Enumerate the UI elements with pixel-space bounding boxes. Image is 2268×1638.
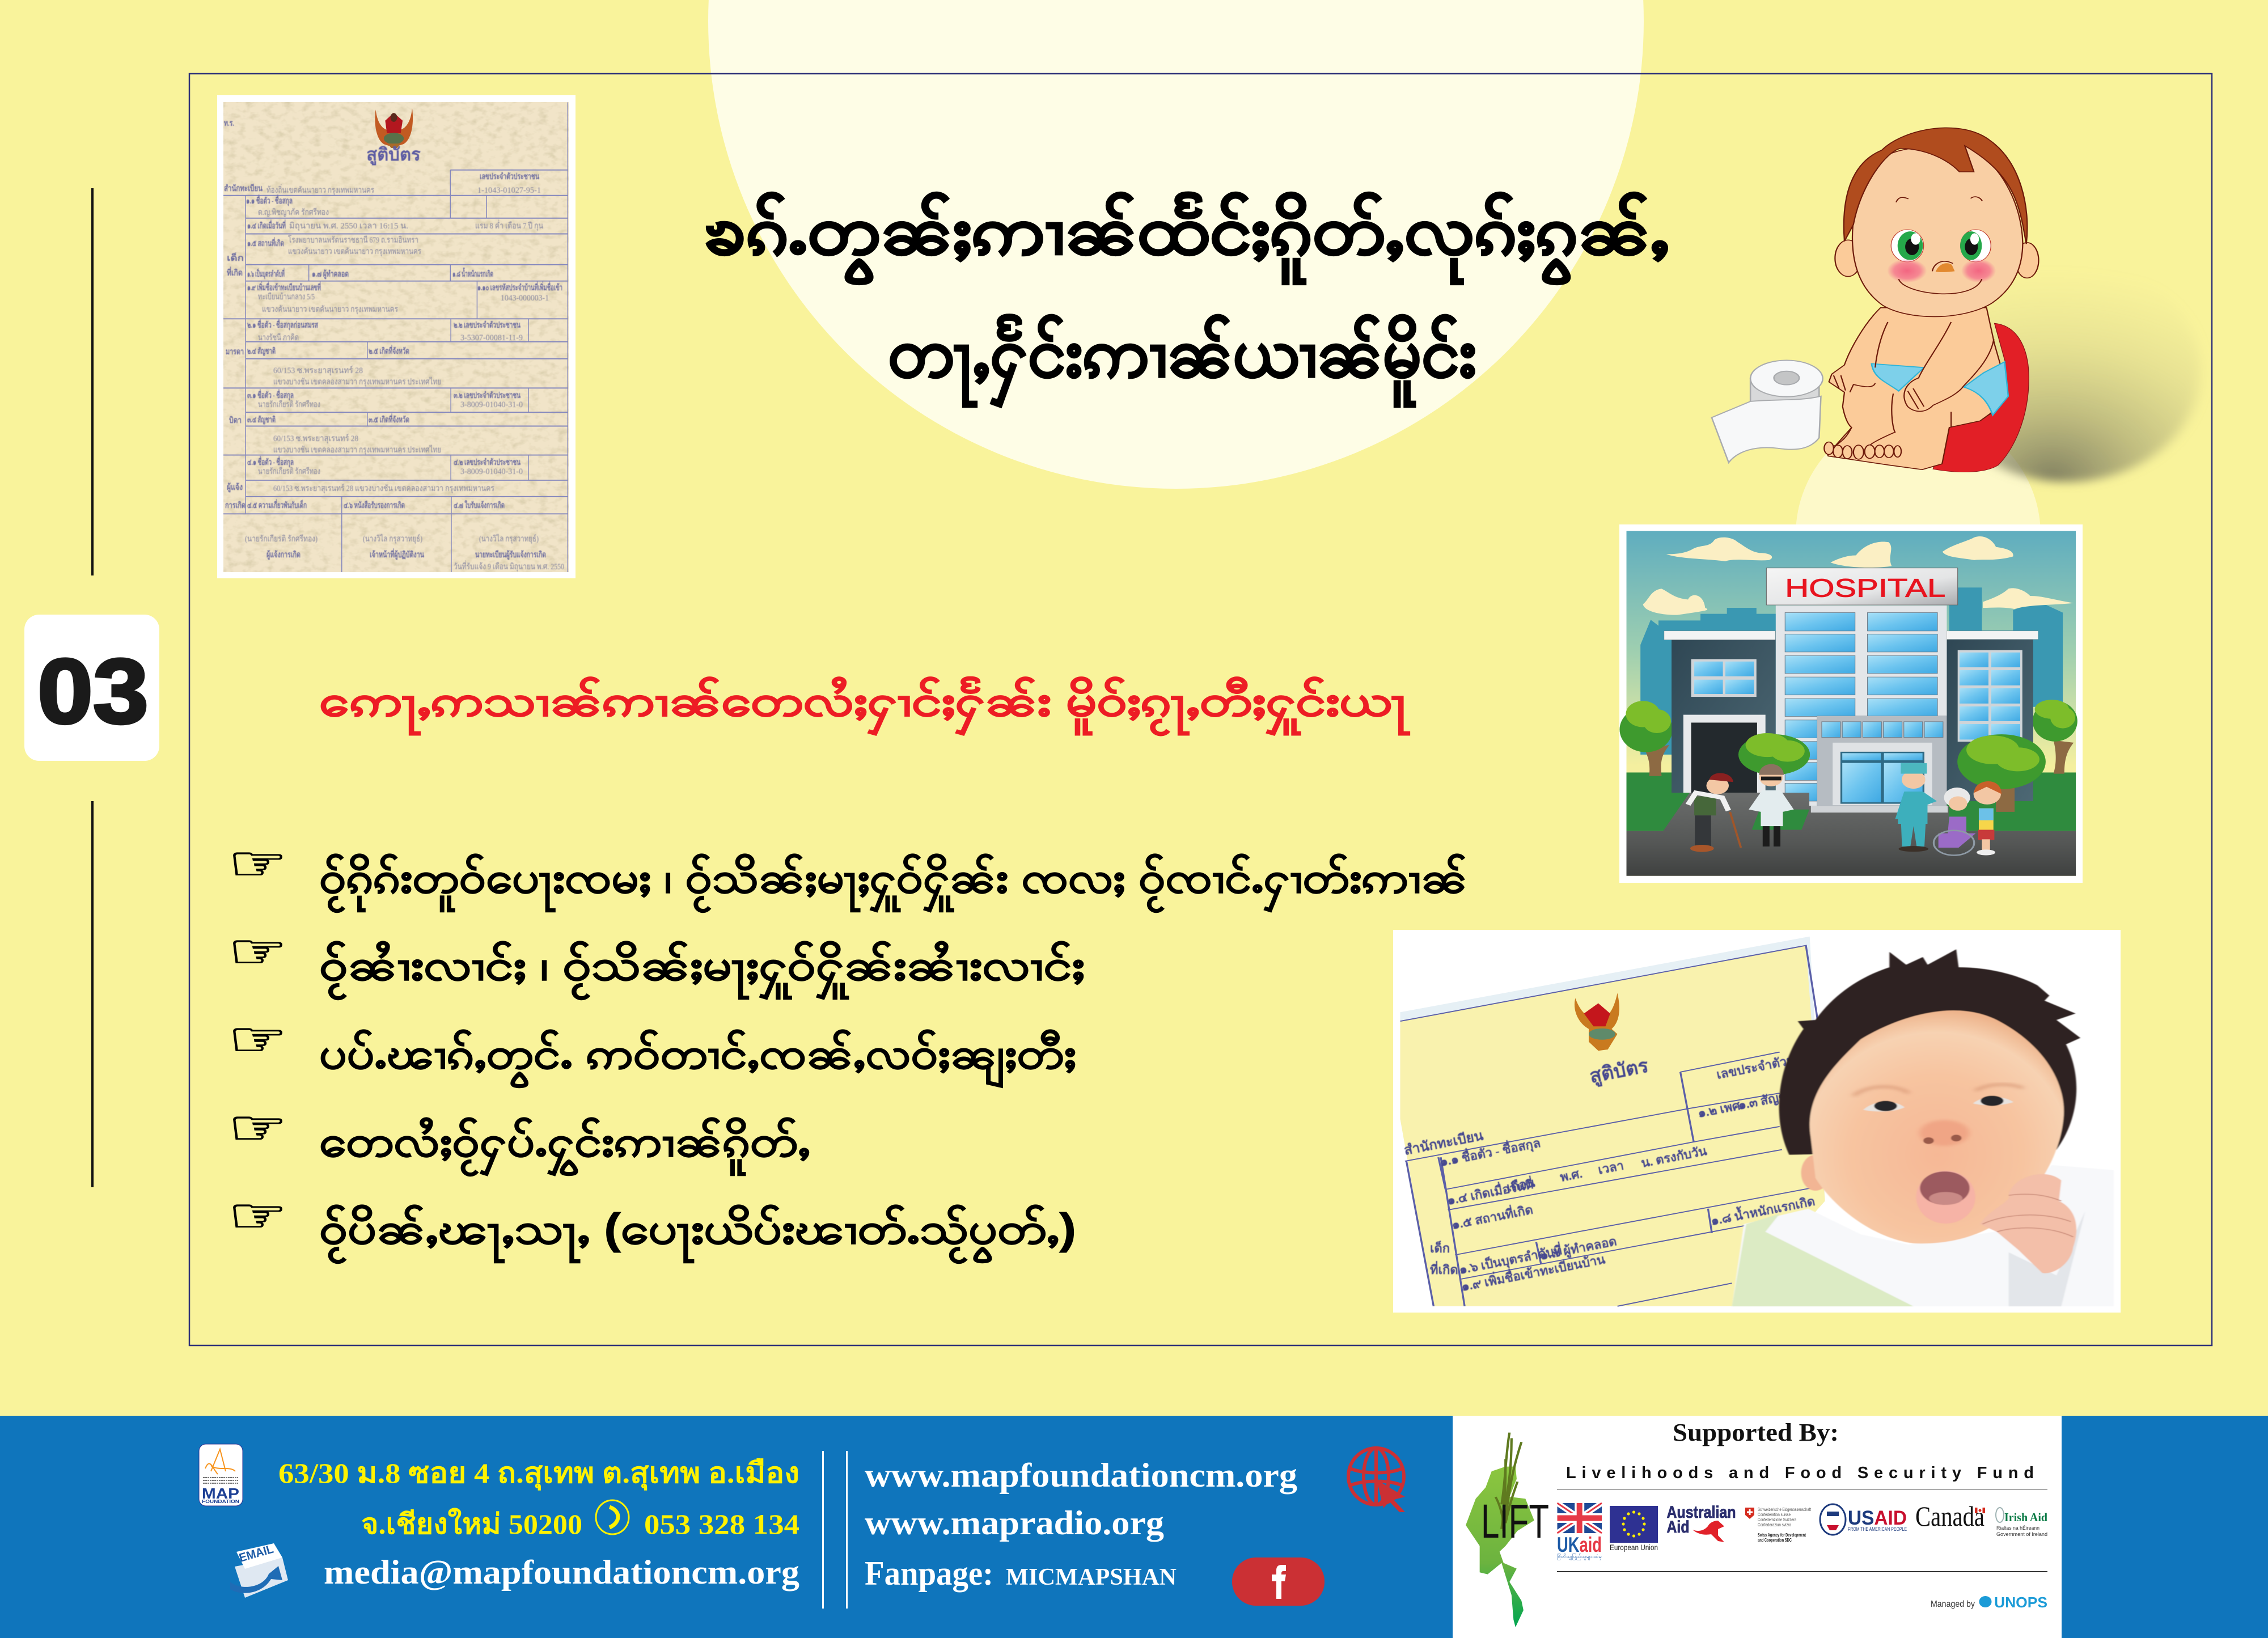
certificate text: นายทะเบียนผู้รับแจ้งการเกิด bbox=[475, 549, 546, 560]
certificate text: ท้องถิ่นเขตคันนายาว กรุงเทพมหานคร bbox=[266, 184, 374, 196]
decorative small cream circle behind baby bbox=[1796, 412, 2041, 657]
item 1: ☞ bbox=[228, 836, 287, 891]
certificate text: โรงพยาบาลนพรัตนราชธานี 679 ถ.รามอินทรา bbox=[288, 235, 418, 245]
hospital sign: HOSPITAL bbox=[1785, 574, 1945, 603]
certificate thai text: ๑.๓ สัญชาติ bbox=[1737, 1086, 1803, 1113]
certificate text: ๒.๔ สัญชาติ bbox=[247, 346, 276, 356]
baby ear bbox=[1801, 1155, 1830, 1191]
clouds bbox=[1643, 536, 2074, 615]
certificate text: ๑.๑ ชื่อตัว - ชื่อสกุล bbox=[246, 194, 293, 206]
item 3 bbox=[228, 1011, 1076, 1089]
front trees bbox=[1738, 733, 2046, 812]
item 4: ☞ bbox=[228, 1100, 287, 1156]
certificate text: ๔.๑ ชื่อตัว - ชื่อสกุล bbox=[247, 456, 294, 468]
certificate text: (นายรักเกียรติ รักศรีทอง) bbox=[245, 534, 318, 544]
logo: UK aid: ဗြိတိသျှပြည်သူများထံမှ bbox=[1557, 1553, 1602, 1560]
certificate text: มิถุนายน พ.ศ. 2550 เวลา 16:15 น. bbox=[289, 221, 408, 231]
title bbox=[704, 192, 1669, 408]
skyline bbox=[1640, 587, 2063, 755]
item 3: ☞ bbox=[228, 1011, 287, 1067]
footer websites: Fanpage: bbox=[865, 1555, 993, 1592]
certificate text: ๑.๕ สถานที่เกิด bbox=[247, 237, 284, 248]
certificate text: 60/153 ซ.พระยาสุเรนทร์ 28 bbox=[273, 366, 363, 376]
logo: Irish Aid: Rialtas na hÉireann bbox=[1996, 1525, 2039, 1531]
certificate text: แขวงคันนายาว เขตคันนายาว กรุงเทพมหานคร bbox=[288, 247, 421, 257]
old man bbox=[1706, 777, 1729, 794]
logo: Canada: Canada bbox=[1915, 1500, 1984, 1532]
item 5: ဝႂ်ပိၼ်ႇၽႃႇသႃႇ (ပေႃးယိပ်းၽၢတ်ႉသႂ်ပွတ်ႇ) bbox=[319, 1204, 1076, 1264]
managed by UNOPS: UNOPS bbox=[1994, 1594, 2047, 1611]
item 4: တေလႆႈဝႂ်ႁပ်ႉႁွင်းဢၢၼ်ၵိူတ်ႇ bbox=[319, 1117, 810, 1177]
certificate text: แขวงบางชัน เขตคลองสามวา กรุงเทพมหานคร ประเทศไทย bbox=[273, 376, 441, 387]
logo: Swiss agency bbox=[1745, 1507, 1812, 1543]
item 5 bbox=[228, 1188, 1076, 1264]
certificate text: ๔.๕ ความเกี่ยวพันกับเด็ก bbox=[247, 499, 307, 510]
pavement bbox=[1627, 793, 2076, 876]
certificate text bbox=[224, 119, 564, 572]
certificate text: แรม 8 ค่ำ เดือน 7 ปี กุน bbox=[475, 219, 543, 231]
logo: Australian Aid: Aid bbox=[1667, 1518, 1690, 1537]
photo: newborn baby with birth certificate bbox=[1393, 930, 2121, 1313]
certificate text: การเกิด bbox=[225, 500, 246, 510]
red potty bbox=[1933, 323, 2029, 472]
wings bbox=[1672, 640, 1776, 793]
fund name: Livelihoods and Food Security Fund bbox=[1566, 1464, 2034, 1482]
decorative large cream circle behind title bbox=[708, 0, 1644, 489]
certificate text: ๒.๑ ชื่อตัว - ชื่อสกุลก่อนสมรส bbox=[247, 319, 319, 331]
icon: email envelope: EMAIL bbox=[238, 1543, 275, 1565]
certificate text: ผู้แจ้งการเกิด bbox=[266, 549, 301, 560]
certificate text: ๒.๕ เกิดที่จังหวัด bbox=[369, 345, 409, 356]
toes bbox=[1824, 442, 1901, 459]
certificate thai text: ๑.๑ ชื่อตัว - ชื่อสกุล bbox=[1438, 1133, 1542, 1170]
ears bbox=[1835, 240, 1861, 277]
central tower bbox=[1776, 606, 1947, 806]
logo: Swiss agency: Confederaziun svizra bbox=[1758, 1522, 1791, 1527]
certificate text: ๓.๒ เลขประจำตัวประชาชน bbox=[454, 391, 521, 400]
managed by UNOPS: Managed by bbox=[1931, 1599, 1975, 1609]
cheeks bbox=[1887, 259, 1927, 283]
potty shadow bbox=[1933, 258, 2201, 482]
certificate thai text: เดือน bbox=[1505, 1175, 1536, 1195]
certificate text: ๓.๔ สัญชาติ bbox=[247, 414, 276, 425]
logo: European Union bbox=[1610, 1506, 1658, 1552]
certificate text: 60/153 ซ.พระยาสุเรนทร์ 28 แขวงบางชัน เขตคลองสามวา กรุงเทพมหานคร bbox=[273, 484, 494, 494]
certificate text: วันที่รับแจ้ง 9 เดือน มิถุนายน พ.ศ. 2550 bbox=[454, 560, 564, 572]
smile and brows bbox=[1896, 197, 1982, 294]
logo: Australian Aid: Australian bbox=[1667, 1503, 1736, 1522]
certificate text: ท.ร. bbox=[224, 119, 234, 128]
entrance block bbox=[1817, 716, 1947, 806]
certificate text: นางรัชนี ภาคิด bbox=[258, 333, 299, 342]
certificate text: 3-8009-01040-31-0 bbox=[460, 467, 523, 476]
footer email: media@mapfoundationcm.org bbox=[324, 1554, 799, 1591]
hospital illustration bbox=[1619, 524, 2083, 883]
logo: USAID bbox=[1820, 1504, 1907, 1535]
certificate text: 1-1043-01027-95-1 bbox=[477, 186, 541, 195]
item 2 bbox=[228, 924, 1085, 1001]
illustration: baby sitting on potty with toilet roll bbox=[1712, 128, 2201, 482]
left door bbox=[1683, 715, 1766, 793]
certificate text: เด็ก bbox=[227, 252, 244, 263]
baby nose bbox=[1919, 1120, 1969, 1146]
garuda emblem bbox=[375, 108, 413, 148]
certificate text: ๑.๗ ผู้ทำคลอด bbox=[312, 269, 349, 280]
tower windows bbox=[1785, 612, 1937, 801]
nose bbox=[1936, 263, 1954, 272]
logo: Irish Aid: Government of Ireland bbox=[1996, 1531, 2047, 1537]
people bbox=[1688, 763, 2002, 856]
certificate thai text: ๑.๗ ผู้ทำคลอด bbox=[1539, 1234, 1618, 1264]
supported by heading: Supported By: bbox=[1673, 1419, 1839, 1446]
footer websites bbox=[865, 1457, 1297, 1592]
title: ၶၵ်ႉတွၼ်ႈဢၢၼ်ထႅင်ႈၵိူတ်ႇလုၵ်ႈၵွၼ်ႇ bbox=[704, 192, 1669, 285]
item 3: ပပ်ႉၽၢၵ်ႇတွင်ႉ ဢဝ်တၢင်ႇၸၼ်ႇလဝ်ႈၼျႈတီႈ bbox=[319, 1029, 1076, 1089]
icon: phone bbox=[596, 1500, 629, 1534]
baby brow shading bbox=[1854, 1085, 2023, 1096]
certificate text: (นางวิไล กรุสวาทยุธ์) bbox=[363, 534, 422, 544]
certificate thai text: น. ตรงกับวัน bbox=[1640, 1144, 1708, 1170]
certificate text: แขวงบางชัน เขตคลองสามวา กรุงเทพมหานคร ประเทศไทย bbox=[273, 445, 441, 455]
logo: European Union: European Union bbox=[1610, 1543, 1658, 1552]
certificate thai text: สูติบัตร bbox=[1588, 1055, 1651, 1089]
right window bbox=[1958, 650, 2022, 742]
logo: Swiss agency: Swiss Agency for Development bbox=[1758, 1533, 1806, 1538]
item 5: ☞ bbox=[228, 1188, 287, 1243]
ground bbox=[1627, 772, 2076, 831]
certificate text: นายรักเกียรติ รักศรีทอง bbox=[258, 400, 320, 409]
certificate thai text bbox=[1403, 1044, 1840, 1294]
certificate thai text: ที่เกิด bbox=[1430, 1260, 1458, 1277]
footer websites: www.mapradio.org bbox=[865, 1504, 1164, 1542]
hospital sign bbox=[1766, 568, 1958, 605]
certificate text: ๒.๒ เลขประจำตัวประชาชน bbox=[454, 320, 521, 330]
logo: USAID: USAID bbox=[1848, 1507, 1907, 1529]
certificate text: ผู้แจ้ง bbox=[227, 482, 243, 493]
left window bbox=[1691, 659, 1757, 697]
left vertical rule bottom bbox=[91, 801, 94, 1187]
certificate thai text: ๑.๖ เป็นบุตรลำดับที่ bbox=[1457, 1241, 1563, 1278]
baby hand bbox=[1980, 1174, 2076, 1273]
baby eyes bbox=[1863, 1096, 2013, 1111]
certificate thai text: ๑.๙ เพิ่มชื่อเข้าทะเบียนบ้าน bbox=[1459, 1250, 1606, 1294]
nurse bbox=[1902, 771, 1926, 789]
logo: UK aid bbox=[1557, 1503, 1602, 1560]
logo: Irish Aid: Irish Aid bbox=[2004, 1510, 2047, 1524]
trees behind bbox=[1619, 700, 2077, 776]
certificate text: สำนักทะเบียน bbox=[224, 184, 263, 193]
logo: UK aid: UKaid bbox=[1557, 1533, 1602, 1556]
doctor bbox=[1759, 768, 1783, 786]
certificate thai text: ๑.๒ เพศ bbox=[1696, 1098, 1742, 1120]
certificate text: ด.ญ.พิชญาภัค รักศรีทอง bbox=[258, 208, 329, 217]
certificate text: ที่เกิด bbox=[227, 266, 243, 278]
certificate text: 3-5307-00081-11-9 bbox=[460, 333, 523, 342]
certificate text: ๑.๑๐ เลขรหัสประจำบ้านที่เพิ่มชื่อเข้า bbox=[477, 281, 562, 293]
certificate text: ๔.๒ เลขประจำตัวประชาชน bbox=[454, 458, 521, 467]
LIFT map logo bbox=[1466, 1433, 1549, 1627]
certificate text: 60/153 ซ.พระยาสุเรนทร์ 28 bbox=[273, 434, 358, 444]
diaper bbox=[1872, 362, 2008, 415]
item 2: ☞ bbox=[228, 924, 287, 979]
icon: email envelope bbox=[230, 1543, 288, 1598]
footer websites: www.mapfoundationcm.org bbox=[865, 1457, 1297, 1494]
logo: USAID: FROM THE AMERICAN PEOPLE bbox=[1848, 1526, 1907, 1532]
certificate text: แขวงคันนายาว เขตคันนายาว กรุงเทพมหานคร bbox=[262, 305, 398, 315]
document checklist bbox=[228, 836, 1467, 1264]
content frame bbox=[189, 74, 2212, 1345]
baby body bbox=[1825, 308, 2007, 469]
logo: Irish Aid bbox=[1996, 1508, 2047, 1537]
logo: Swiss agency: Confédération suisse bbox=[1758, 1512, 1791, 1517]
eyes bbox=[1891, 230, 1991, 262]
certificate thai text: ๑.๕ สถานที่เกิด bbox=[1450, 1200, 1534, 1232]
certificate thai text: สำนักทะเบียน bbox=[1403, 1128, 1485, 1158]
footer logo: MAP Foundation bbox=[199, 1444, 243, 1506]
image: birth certificate document bbox=[217, 95, 576, 578]
certificate text: สูติบัตร bbox=[366, 145, 421, 166]
baby mouth bbox=[1916, 1171, 1975, 1224]
red subheading: ဢေႃႇဢသၢၼ်ဢၢၼ်တေလႆႈႁၢင်ႈႁႅၼ်း မိူဝ်ႈၵႂႃႇတီႈႁူင်းယႃ bbox=[319, 676, 1410, 737]
certificate text: บิดา bbox=[229, 415, 242, 425]
footer websites: MICMAPSHAN bbox=[1006, 1564, 1177, 1590]
section number badge bbox=[24, 615, 159, 761]
LIFT map logo: LIFT bbox=[1481, 1495, 1549, 1548]
footer address: 63/30 ม.8 ซอย 4 ถ.สุเทพ ต.สุเทพ อ.เมือง bbox=[278, 1457, 799, 1491]
footer logo: MAP Foundation: MAP bbox=[202, 1485, 239, 1502]
certificate text: 1043-000003-1 bbox=[501, 294, 549, 303]
certificate thai text: ๑.๔ เกิดเมื่อวันที่ bbox=[1445, 1175, 1534, 1208]
certificate text: นายรักเกียรติ รักศรีทอง bbox=[258, 467, 320, 476]
baby clothing bbox=[1732, 1165, 2114, 1306]
left vertical rule top bbox=[91, 188, 94, 575]
wheelchair lady bbox=[1944, 788, 1970, 807]
certificate text: ๓.๕ เกิดที่จังหวัด bbox=[369, 413, 409, 425]
item 1: ဝႂ်ၵိုၵ်းတူဝ်ပေႃးၸမႈ ၊ ဝႂ်သိၼ်ႈမႃႈႁူဝ်ႁိူၼ်း ၸလႈ ဝႂ်ၸၢင်ႉႁၢတ်းဢၢၼ် bbox=[319, 853, 1467, 913]
certificate text: ๑.๘ น้ำหนักแรกเกิด bbox=[452, 267, 493, 279]
sponsor panel bbox=[1453, 1416, 2062, 1638]
certificate text: ๓.๑ ชื่อตัว - ชื่อสกุล bbox=[247, 389, 294, 401]
certificate text: เลขประจำตัวประชาชน bbox=[480, 172, 540, 181]
certificate text: (นางวิไล กรุสวาทยุธ์) bbox=[479, 534, 539, 544]
boy bbox=[1974, 784, 2001, 805]
certificate text: 3-8009-01040-31-0 bbox=[460, 400, 523, 409]
garuda emblem bbox=[1575, 993, 1619, 1051]
item 1 bbox=[228, 836, 1467, 913]
certificate thai text: เด็ก bbox=[1430, 1240, 1450, 1255]
certificate text: มารดา bbox=[226, 348, 244, 357]
icon: red globe with cursor bbox=[1348, 1448, 1405, 1512]
certificate text: ทะเบียนบ้านกลาง 5/5 bbox=[258, 292, 315, 302]
certificate text: ๑.๙ เพิ่มชื่อเข้าทะเบียนบ้านเลขที่ bbox=[247, 281, 321, 293]
baby limb lines bbox=[1834, 322, 1994, 446]
hair bbox=[1844, 128, 2027, 244]
baby hair bbox=[1779, 949, 2080, 1155]
certificate text: ๔.๖ หนังสือรับรองการเกิด bbox=[344, 500, 405, 510]
certificate sheet bbox=[1400, 937, 1825, 1306]
title: တႃႇႁႅင်းဢၢၼ်ယၢၼ်မိူင်း bbox=[888, 314, 1476, 408]
certificate thai text: พ.ศ. bbox=[1559, 1166, 1584, 1184]
footer address bbox=[278, 1457, 799, 1540]
certificate thai text: ๑.๘ น้ำหนักแรกเกิด bbox=[1709, 1192, 1816, 1228]
certificate text: ๑.๖ เป็นบุตรลำดับที่ bbox=[247, 268, 285, 280]
footer logo: MAP Foundation: FOUNDATION bbox=[202, 1499, 239, 1504]
managed by UNOPS bbox=[1931, 1594, 2047, 1611]
certificate thai text: เลขประจำตัวประชาชน bbox=[1715, 1044, 1840, 1082]
certificate text: เจ้าหน้าที่ผู้ปฏิบัติงาน bbox=[370, 548, 425, 560]
item 4 bbox=[228, 1100, 810, 1177]
sponsor rule top bbox=[1557, 1489, 2047, 1490]
item 2: ဝႂ်ၼၢႆးလၢင်ႈ ၊ ဝႂ်သိၼ်ႈမႃႈႁူဝ်ႁိူၼ်းၼၢႆးလၢင်ႈ bbox=[319, 941, 1085, 1001]
certificate text: ๔.๗ ใบรับแจ้งการเกิด bbox=[454, 500, 505, 510]
footer address: จ.เชียงใหม่ 50200 bbox=[361, 1508, 582, 1540]
newborn baby bbox=[1732, 949, 2114, 1306]
section number badge: 03 bbox=[37, 640, 149, 743]
sponsor rule bottom bbox=[1557, 1571, 2047, 1572]
certificate thai text: เวลา bbox=[1597, 1158, 1625, 1177]
logo: Australian Aid bbox=[1667, 1503, 1736, 1542]
logo: Swiss agency: and Cooperation SDC bbox=[1758, 1538, 1792, 1543]
footer address: 053 328 134 bbox=[644, 1508, 799, 1540]
certificate text: ๑.๔ เกิดเมื่อวันที่ bbox=[247, 219, 286, 231]
footer dividers bbox=[822, 1451, 848, 1609]
logo: Swiss agency: Schweizerische Eidgenossenschaft bbox=[1758, 1507, 1812, 1512]
baby face bbox=[1810, 1010, 2064, 1243]
logo: Swiss agency: Confederazione Svizzera bbox=[1758, 1517, 1796, 1522]
toilet roll bbox=[1712, 360, 1823, 463]
footer bar bbox=[0, 1416, 2268, 1638]
icon: facebook pill bbox=[1232, 1557, 1325, 1606]
face bbox=[1852, 146, 2022, 316]
